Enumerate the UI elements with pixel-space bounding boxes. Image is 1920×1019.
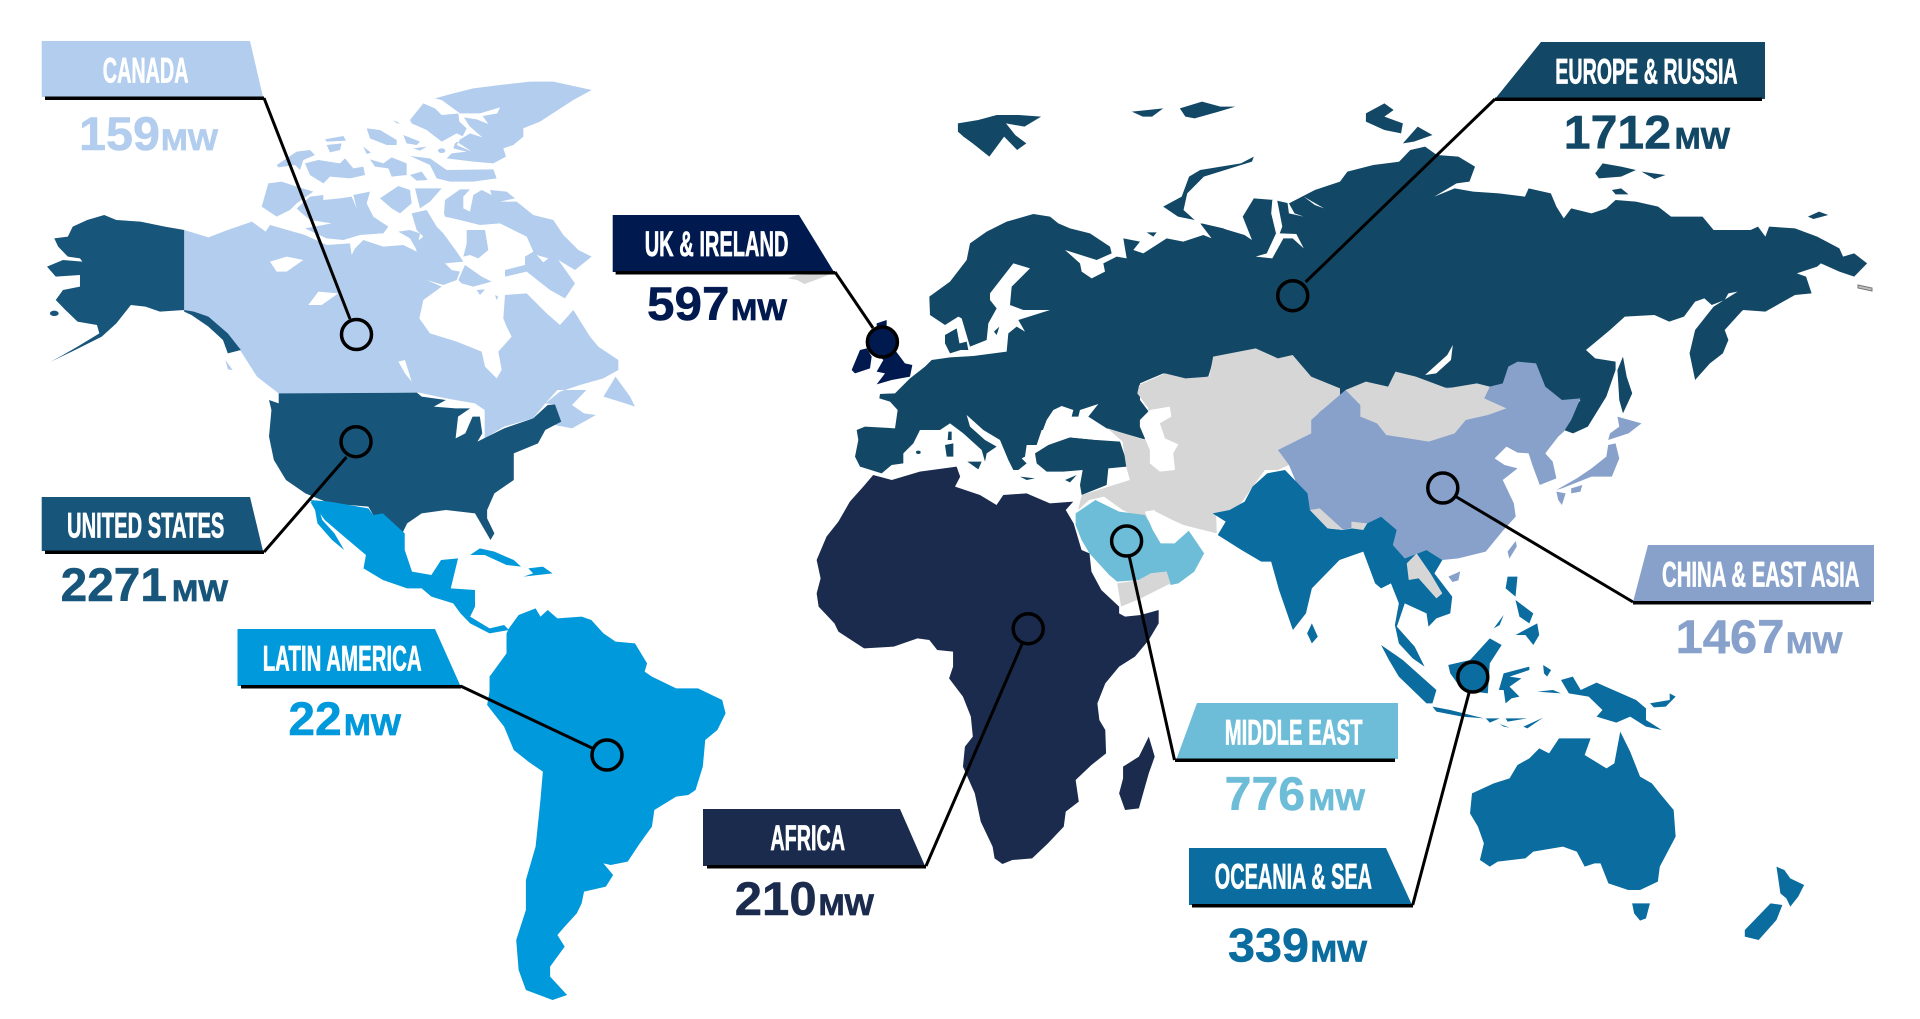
label: Europe and Russia: EUROPE & RUSSIA xyxy=(1555,52,1738,91)
label: Europe and Russia: 1712 xyxy=(1564,105,1671,158)
label: UK and Ireland xyxy=(613,215,835,330)
label: Africa: 210 xyxy=(735,872,817,925)
label: Europe and Russia xyxy=(1495,42,1765,158)
map: UK and Ireland xyxy=(852,320,912,384)
label: Oceania and Sea: 339 xyxy=(1228,918,1309,972)
label: China and East Asia xyxy=(1633,545,1874,663)
map: Canada xyxy=(184,82,635,438)
label: Latin America: MW xyxy=(344,709,402,742)
map: Middle East xyxy=(1076,500,1204,607)
label: Middle East xyxy=(1175,703,1398,820)
label: Middle East: 776 xyxy=(1225,767,1305,820)
label: Latin America: LATIN AMERICA xyxy=(263,640,422,679)
label: Africa: MW xyxy=(819,889,875,922)
map: United States and Alaska xyxy=(47,215,561,540)
map: Latin America xyxy=(310,500,726,1000)
label: Middle East: MW xyxy=(1309,784,1366,817)
label: UK and Ireland: UK & IRELAND xyxy=(645,225,788,264)
label: Latin America: 22 xyxy=(288,692,342,745)
label: Latin America xyxy=(238,629,461,745)
map: Europe and Russia xyxy=(855,102,1867,495)
map: India, Southeast Asia and Oceania xyxy=(1213,470,1804,940)
label: United States: UNITED STATES xyxy=(67,506,224,545)
label: Canada: MW xyxy=(161,124,219,157)
label: Canada: 159 xyxy=(79,107,160,160)
label: United States: MW xyxy=(172,575,229,608)
label: Canada: CANADA xyxy=(103,51,188,90)
label: China and East Asia: 1467 xyxy=(1676,610,1784,663)
label: UK and Ireland: 597 xyxy=(647,277,730,330)
map: Africa xyxy=(817,467,1159,864)
label: Europe and Russia: MW xyxy=(1675,122,1731,155)
label: Middle East: MIDDLE EAST xyxy=(1225,713,1362,752)
label: United States: 2271 xyxy=(61,558,167,611)
label: Africa xyxy=(703,809,926,925)
label: Oceania and Sea xyxy=(1189,848,1413,972)
location markers xyxy=(341,281,1488,770)
label: United States xyxy=(42,497,264,611)
label: Oceania and Sea: MW xyxy=(1311,936,1368,968)
label: UK and Ireland: MW xyxy=(731,294,788,327)
leader lines xyxy=(264,98,1633,905)
label: China and East Asia: MW xyxy=(1786,627,1843,660)
label: Africa: AFRICA xyxy=(770,819,845,858)
map: Central Asia and unassigned countries xyxy=(788,273,1340,533)
label: Oceania and Sea: OCEANIA & SEA xyxy=(1215,857,1372,896)
small island xyxy=(1858,285,1872,291)
label: Canada xyxy=(42,41,264,160)
map: China and East Asia xyxy=(1278,362,1641,582)
